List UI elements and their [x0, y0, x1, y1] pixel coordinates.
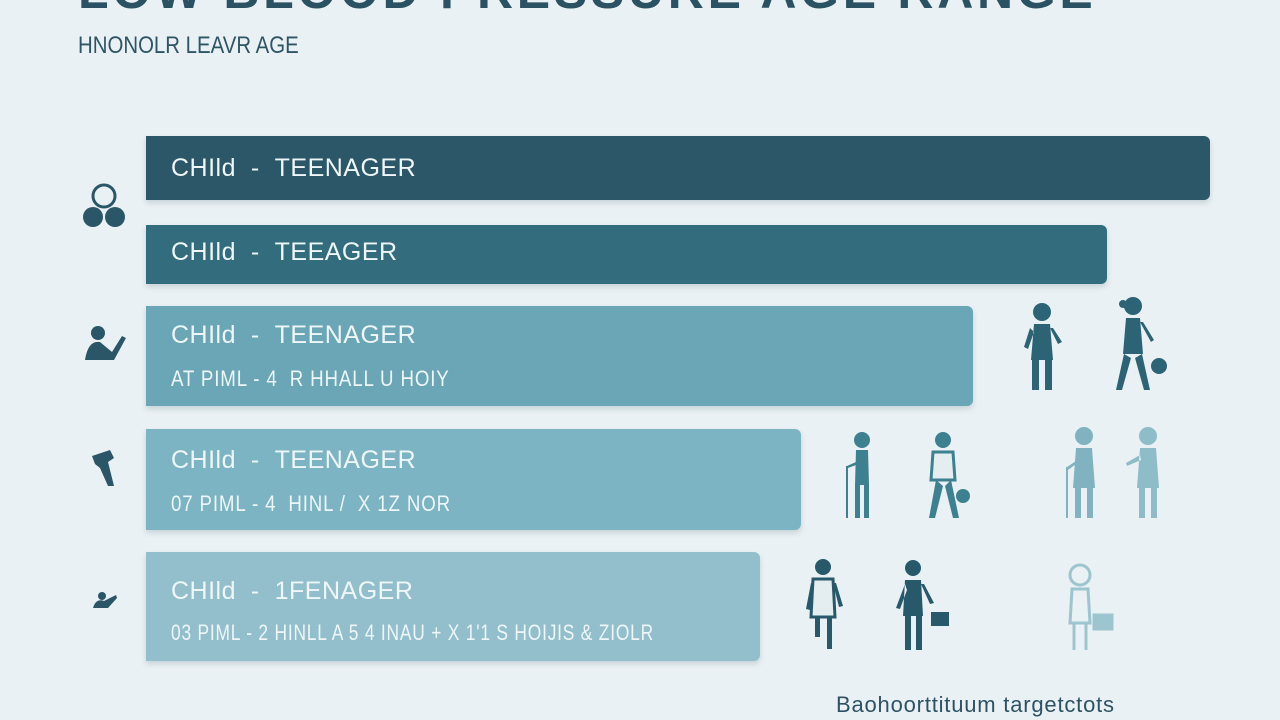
bar 4: 07 PIML - 4 HINL / X 1Z NOR [171, 491, 451, 516]
icon: small person [93, 592, 117, 608]
bar 5: CHIld - 1FENAGER [171, 577, 413, 605]
figure row 3 [806, 559, 1112, 650]
icon: runner [92, 450, 114, 486]
bar 3 [146, 306, 973, 406]
bar 2: CHIld - TEEAGER [171, 238, 398, 266]
figure row 1 [1024, 297, 1167, 390]
figure row 2 [846, 432, 970, 518]
bar 4: CHIld - TEENAGER [171, 446, 416, 474]
bar 1: CHIld - TEENAGER [171, 154, 416, 182]
footer text: Baohoorttituum targetctots [836, 692, 1115, 717]
bar 2 [146, 225, 1107, 284]
bar 3: AT PIML - 4 R HHALL U HOIY [171, 366, 450, 391]
bar 1 [146, 136, 1210, 200]
bar 5: 03 PIML - 2 HINLL A 5 4 INAU + X 1'1 S HOIJIS & ZIOLR [171, 620, 654, 645]
icon: circles [83, 185, 125, 227]
subtitle: HNONOLR LEAVR AGE [78, 32, 299, 59]
icon: seated person [85, 326, 126, 360]
left icons [83, 184, 126, 608]
bar 4 [146, 429, 801, 530]
bar 5 [146, 552, 760, 661]
bar 3: CHIld - TEENAGER [171, 321, 416, 349]
people figures [806, 297, 1167, 650]
